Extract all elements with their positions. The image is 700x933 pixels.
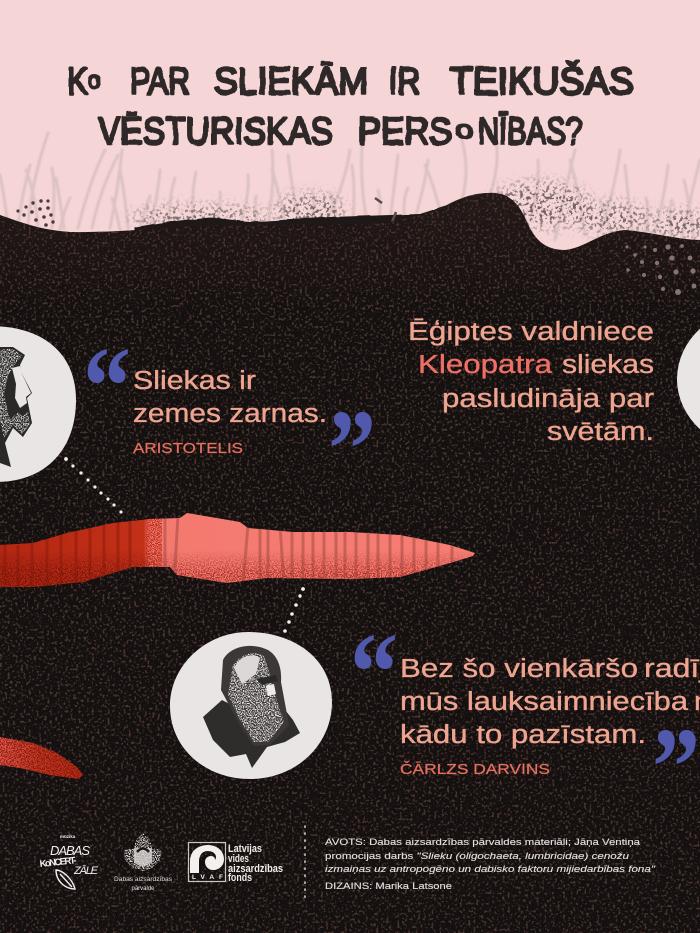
fact: Kleopatra: pasludināja par (442, 385, 655, 413)
source and credits: izmaiņas uz antropogēno un dabisko faktoru mijiedarbības fona" (325, 864, 656, 875)
closing quote mark: ” (328, 388, 376, 512)
attribution: ČĀRLZS DARVINS (400, 761, 550, 778)
fact: Kleopatra (408, 318, 655, 446)
logo: LVAF: vides (228, 853, 249, 865)
quote: Charles Darwin: kādu to pazīstam. (400, 721, 646, 749)
title: K (67, 61, 88, 103)
source and credits: DIZAINS: Marika Latsone (325, 881, 452, 892)
quote: Charles Darwin: Bez šo vienkāršo (400, 655, 638, 683)
logo: Dabas koncertzāle: KoNCERT- (39, 855, 77, 870)
speckled dots on soil and sky (16, 199, 696, 295)
logo: Dabas aizsardzības pārvalde: pārvalde (131, 886, 155, 892)
worm: upper (0, 510, 480, 590)
title: IR (389, 61, 420, 103)
source and credits: AVOTS: Dabas aizsardzības pārvaldes materiāli; Jāņa Ventiņa (325, 837, 641, 848)
title: SLIEKĀM (214, 61, 368, 103)
fact: Kleopatra: svētām. (547, 418, 654, 446)
logo: Dabas koncertzāle: DABAS (50, 843, 90, 858)
logo: LVAF: Latvijas (228, 843, 262, 855)
logo: Dabas koncertzāle: mūzika (60, 834, 76, 839)
logo: LVAF (188, 842, 283, 884)
title: NĪBAS? (478, 111, 582, 153)
logo: Dabas koncertzāle (39, 834, 99, 889)
title: PERS (358, 111, 452, 153)
title (67, 59, 634, 153)
attribution: ARISTOTELIS (133, 440, 243, 457)
logo: LVAF: fonds (228, 872, 252, 884)
dotted connector: Darwin to worm (283, 587, 305, 633)
quote: Aristotle (83, 325, 376, 512)
quote: Aristotle: zemes zarnas. (133, 400, 327, 428)
title: VĒSTURISKAS (98, 111, 333, 153)
portrait: Kleopatra (circle cropped at edge) (677, 307, 700, 451)
worm: lower (0, 737, 83, 779)
fact: Kleopatra: Ēģiptes valdniece (408, 318, 654, 346)
quote: Aristotle: Sliekas ir (133, 367, 257, 395)
portrait: Aristotle (0, 326, 76, 482)
quote: Charles Darwin: mūs lauksaimniecība (400, 688, 689, 716)
opening quote mark: “ (350, 611, 398, 735)
dotted connector: Aristotle to worm (64, 457, 123, 514)
title: PAR (130, 61, 190, 103)
source and credits: promocijas darbs "Slieku (oligochaeta, lumbricidae) cenožu (325, 851, 630, 862)
logo: LVAF: aizsardzības (228, 863, 283, 875)
logo: Dabas aizsardzības pārvalde (114, 833, 172, 892)
fact: Kleopatra: sliekas (562, 351, 654, 379)
logo: Dabas aizsardzības pārvalde: Dabas aizsardzības (114, 877, 172, 883)
quote: Charles Darwin (350, 611, 700, 830)
logo: Dabas koncertzāle: ZĀLE (73, 865, 99, 877)
grass (0, 133, 700, 240)
opening quote mark: “ (83, 325, 131, 449)
title: o (455, 116, 473, 144)
logo: LVAF: LVAF (192, 874, 223, 881)
portrait: Charles Darwin (170, 632, 332, 779)
title: TEIKUŠAS (450, 59, 634, 103)
title: o (88, 66, 101, 94)
fact: Kleopatra: Kleopatra (418, 351, 553, 379)
soil crumbs along the ground edge (130, 183, 700, 239)
source and credits (325, 837, 656, 892)
